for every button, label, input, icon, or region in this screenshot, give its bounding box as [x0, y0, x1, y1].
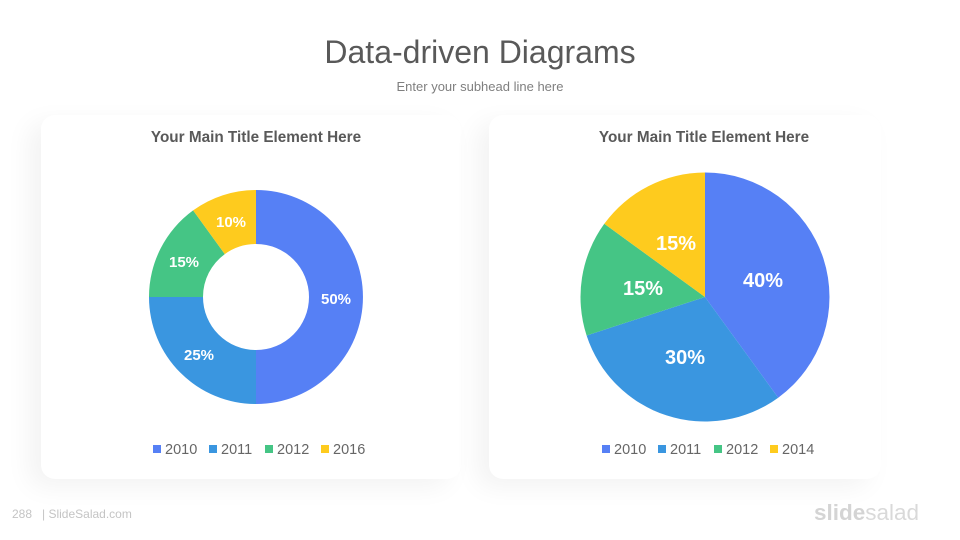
pie chart: 30% — [665, 347, 705, 369]
legend: right chart: 2012 — [726, 442, 758, 458]
right card heading: Your Main Title Element Here — [599, 129, 809, 146]
legend: right chart: 2014 — [782, 442, 814, 458]
donut chart: 15% — [169, 254, 199, 271]
donut chart: 50% — [321, 291, 351, 308]
legend: right chart — [602, 442, 814, 458]
legend: left chart: 2010 — [165, 442, 197, 458]
pie chart: 40% — [743, 270, 783, 292]
pie chart: 15% — [623, 278, 663, 300]
donut chart: 10% — [216, 214, 246, 231]
legend: left chart: 2012 — [277, 442, 309, 458]
legend: left chart: 2016 — [333, 442, 365, 458]
legend: left chart: 2011 — [221, 442, 252, 458]
legend: left chart — [153, 442, 365, 458]
legend: right chart: 2011 — [670, 442, 701, 458]
subhead: Enter your subhead line here — [397, 79, 563, 94]
panel: left card — [41, 115, 461, 479]
legend: right chart: 2010 — [614, 442, 646, 458]
pie chart: 15% — [656, 233, 696, 255]
panel: right card — [489, 115, 881, 479]
title: Data-driven Diagrams — [324, 34, 636, 70]
left card heading: Your Main Title Element Here — [151, 129, 361, 146]
logo wordmark: slidesalad — [814, 500, 919, 525]
donut chart: 25% — [184, 347, 214, 364]
footer: page number and site: 288 | SlideSalad.com — [12, 507, 132, 521]
